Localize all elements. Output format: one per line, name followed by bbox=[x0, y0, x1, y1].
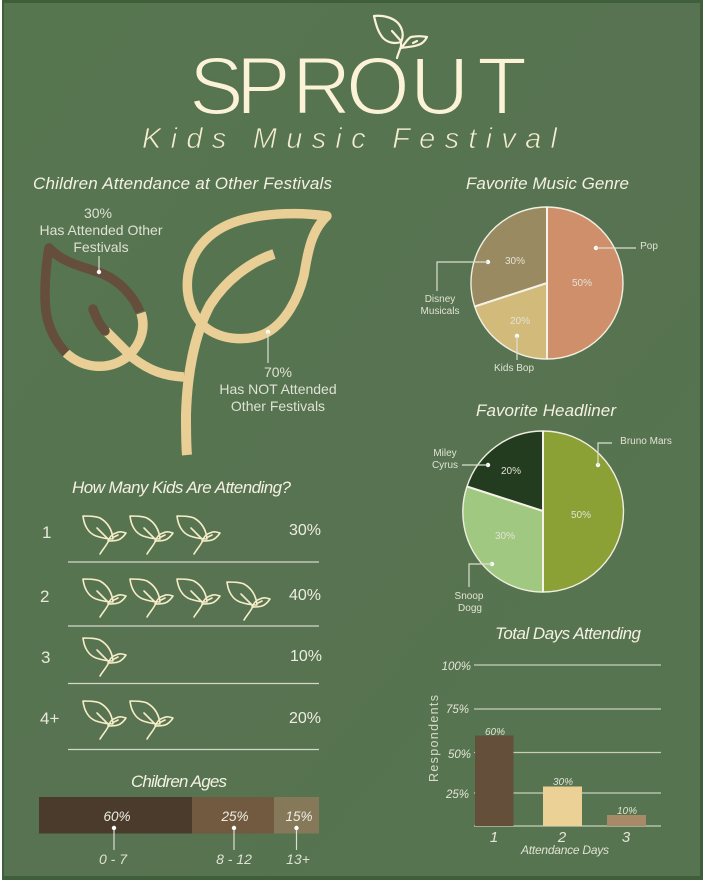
slice: snoop dogg bbox=[463, 486, 543, 592]
title: Sprout wordmark: SPROUT bbox=[189, 41, 527, 132]
pie labels: music genre: 20% bbox=[510, 316, 530, 327]
row: 1 kid bbox=[42, 516, 321, 562]
heading: headliner: Favorite Headliner bbox=[476, 401, 617, 420]
subtitle: Kids Music Festival bbox=[142, 123, 559, 155]
bar chart: total days attending: 1 bbox=[490, 829, 498, 846]
heading: kids attending: How Many Kids Are Attending? bbox=[72, 478, 292, 497]
stacked bar: children ages: 25% bbox=[220, 809, 249, 824]
pie labels: music genre: Pop bbox=[640, 241, 658, 252]
pie labels: headliner: 20% bbox=[501, 466, 521, 477]
slice: disney musicals bbox=[471, 207, 547, 306]
heading: genre: Favorite Music Genre bbox=[466, 174, 629, 193]
row: 2 kids bbox=[40, 579, 321, 626]
title logo bbox=[142, 16, 559, 155]
bar: 1 day: 60% bbox=[485, 727, 505, 738]
pie labels: music genre: Kids Bop bbox=[494, 363, 534, 374]
pie labels: music genre: Musicals bbox=[421, 306, 459, 317]
bar: 2 days: 30% bbox=[553, 777, 573, 788]
row: 4 plus kids: 4+ bbox=[40, 709, 59, 728]
icon: logo sprout bbox=[374, 16, 427, 58]
pie labels: headliner: Snoop bbox=[455, 591, 484, 602]
pie labels: headliner: Miley bbox=[433, 448, 457, 459]
heading: ages: Children Ages bbox=[131, 772, 228, 791]
row: 3 kids bbox=[41, 638, 322, 684]
slice: miley cyrus bbox=[467, 431, 543, 511]
label: 30 percent attended bbox=[40, 205, 163, 274]
stacked bar: children ages bbox=[39, 797, 319, 867]
chart: attendance leaf bbox=[45, 214, 327, 455]
heading: attendance: Children Attendance at Other Festivals bbox=[33, 174, 332, 193]
slice: kids bop bbox=[475, 283, 547, 359]
pie chart: headliner bbox=[463, 431, 624, 592]
stacked bar: children ages: 13+ bbox=[286, 851, 310, 867]
stacked bar: children ages: 0 - 7 bbox=[99, 851, 128, 867]
row: 1 kid: 1 bbox=[42, 523, 51, 542]
pie labels: headliner: Bruno Mars bbox=[620, 436, 672, 447]
row: 2 kids: 40% bbox=[289, 587, 321, 604]
bar chart: total days attending: Attendance Days bbox=[520, 843, 609, 857]
bar: 3 days bbox=[607, 806, 646, 826]
bar: 3 days: 10% bbox=[617, 806, 637, 817]
heading: days: Total Days Attending bbox=[495, 624, 642, 643]
stacked bar: children ages: 15% bbox=[285, 809, 313, 824]
label: 70 percent not attended: Has NOT Attended bbox=[219, 381, 337, 397]
bar chart: total days attending bbox=[427, 661, 661, 857]
bar chart: total days attending: 100% bbox=[442, 661, 471, 673]
row: 1 kid: 30% bbox=[289, 522, 321, 539]
bar chart: total days attending: 75% bbox=[446, 704, 469, 716]
slice: pop bbox=[547, 207, 623, 359]
label: 70 percent not attended: 70% bbox=[264, 364, 292, 380]
slice: bruno mars bbox=[543, 431, 624, 592]
row: 3 kids: 10% bbox=[290, 648, 322, 665]
pie labels: music genre: 50% bbox=[572, 278, 592, 289]
pie labels: headliner: 30% bbox=[495, 531, 515, 542]
bar chart: total days attending: 2 bbox=[557, 829, 567, 846]
stacked bar: children ages: 60% bbox=[103, 809, 131, 824]
bar: 2 days bbox=[543, 777, 582, 826]
pie labels: music genre: Disney bbox=[425, 294, 455, 305]
bar chart: total days attending: 50% bbox=[448, 749, 471, 761]
pie labels: headliner: Dogg bbox=[458, 603, 482, 614]
tan leaf shape 70 percent bbox=[66, 214, 327, 455]
row: 2 kids: 2 bbox=[40, 587, 49, 606]
bar chart: total days attending: 3 bbox=[622, 829, 631, 846]
pie labels: headliner: Cyrus bbox=[432, 460, 458, 471]
brown leaf shape 30 percent bbox=[45, 248, 140, 353]
pie labels: music genre: 30% bbox=[505, 256, 525, 267]
label: 30 percent attended: 30% bbox=[84, 205, 112, 221]
label: 70 percent not attended: Other Festivals bbox=[231, 398, 325, 414]
pie chart: music genre bbox=[471, 207, 623, 359]
label: 30 percent attended: Festivals bbox=[73, 239, 129, 255]
label: 70 percent not attended bbox=[219, 330, 337, 414]
pie labels: headliner bbox=[432, 436, 672, 614]
pie labels: headliner: 50% bbox=[571, 510, 591, 521]
axis title: respondents: Respondents bbox=[427, 695, 441, 782]
bar chart: total days attending: 25% bbox=[445, 789, 469, 801]
row: 4 plus kids bbox=[40, 701, 321, 750]
row: 3 kids: 3 bbox=[41, 648, 50, 667]
label: 30 percent attended: Has Attended Other bbox=[40, 222, 163, 238]
bar: 1 day bbox=[475, 727, 514, 826]
row: 4 plus kids: 20% bbox=[289, 710, 321, 727]
stacked bar: children ages: 8 - 12 bbox=[216, 851, 252, 867]
pictogram: kids attending bbox=[40, 516, 322, 750]
pie labels: music genre bbox=[421, 241, 658, 374]
